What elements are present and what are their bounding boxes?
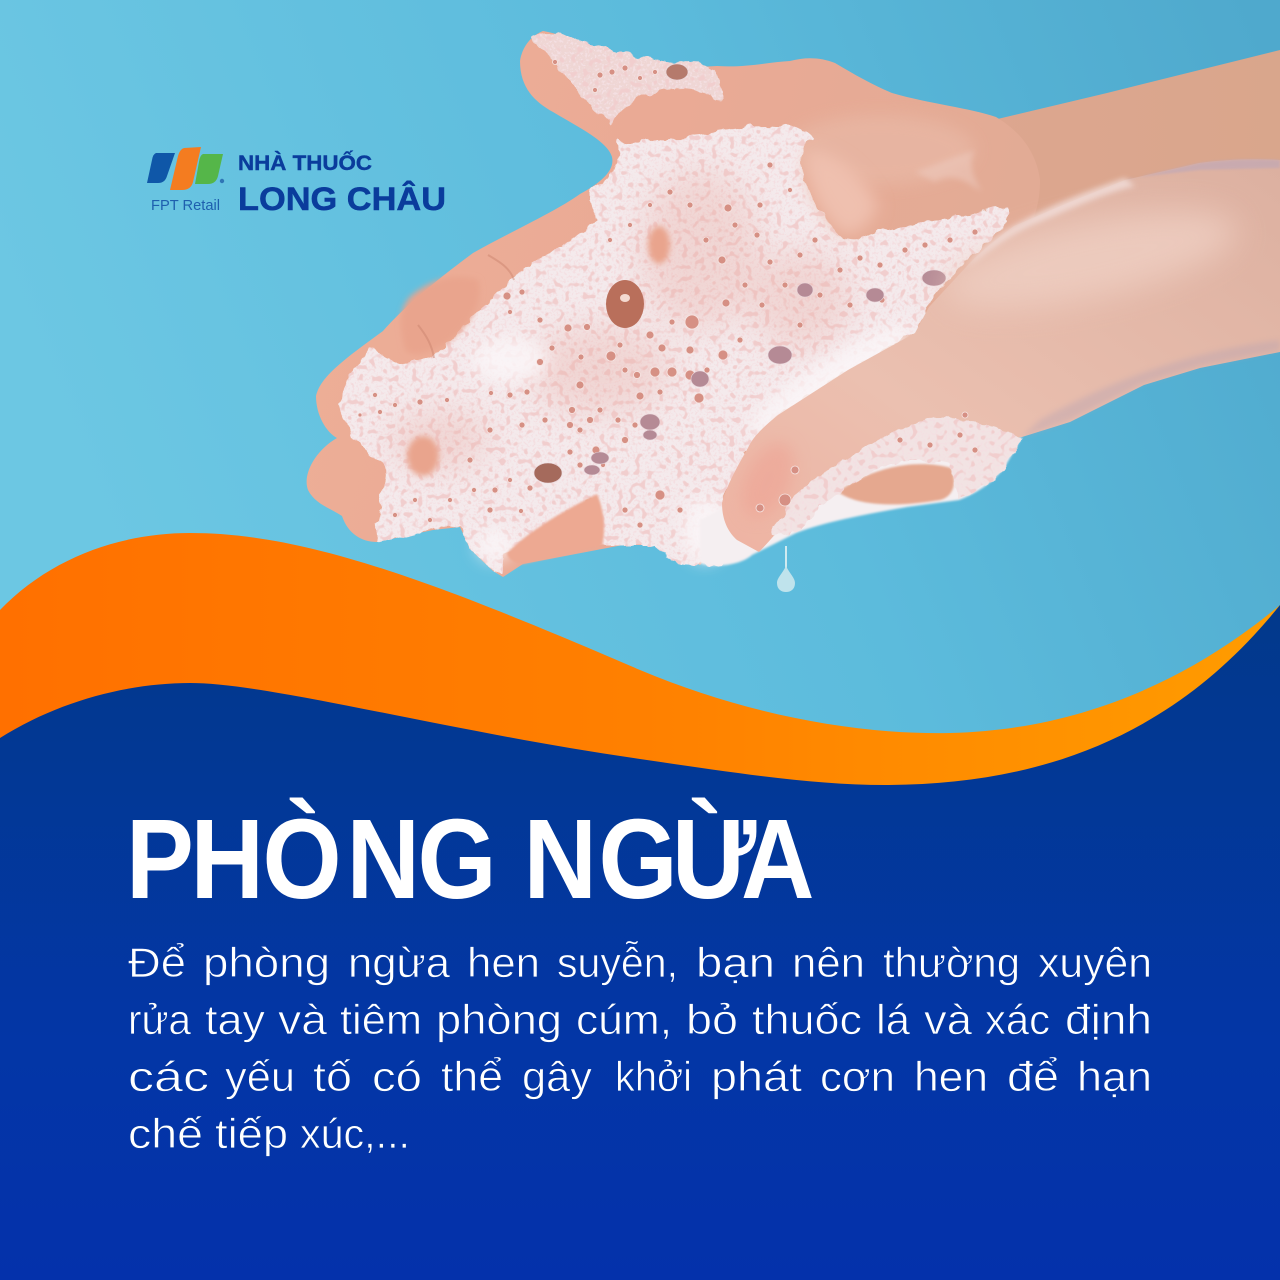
whiter foam areas [472, 311, 921, 562]
line 3: hạn [1077, 1053, 1152, 1100]
line 4: chế [128, 1110, 203, 1157]
FPT Retail text: FPT Retail [151, 198, 220, 214]
line 1 [128, 939, 1152, 986]
gap finger [838, 464, 954, 504]
background: sky blue backdrop [0, 0, 1280, 800]
top rim of lower hand [1125, 159, 1280, 180]
line 1: hen [467, 939, 540, 986]
lower forearm shadow edge [1022, 340, 1280, 437]
pale skin pocket beside foam [807, 150, 878, 234]
line 1: phòng [203, 939, 330, 986]
line 3: khởi [615, 1053, 692, 1100]
logo: FPT Retail and Nhà thuốc Long Châu [147, 147, 446, 217]
foam on lower thumb edge [770, 418, 1022, 535]
photo: soapy hands [307, 31, 1280, 592]
soap specks on back of hand [915, 150, 982, 192]
line 3: các [128, 1053, 209, 1100]
line 2: rửa [128, 996, 192, 1043]
line 2: và [924, 996, 973, 1043]
line 2: xác [985, 996, 1050, 1043]
wave: orange band [0, 533, 1280, 800]
line 1: nên [792, 939, 865, 986]
thumb pads [731, 434, 805, 526]
wave: navy panel [0, 605, 1280, 1280]
line 4: xúc,... [300, 1110, 410, 1157]
foam band under thumb [700, 437, 1022, 566]
bubbles on palm [358, 60, 978, 528]
title: PHÒNG NGỪA [126, 796, 814, 922]
line 2: tay [205, 996, 265, 1043]
soft pink tint across foam [390, 170, 850, 470]
line 2: lá [876, 996, 911, 1043]
line 1: suyễn, [557, 939, 678, 986]
Long Châu text: LONG CHÂU [238, 181, 446, 217]
line 1: Để [128, 939, 186, 986]
line 2: cúm, [576, 996, 672, 1043]
line 3: thể [441, 1053, 503, 1100]
line 2: bỏ [686, 996, 738, 1043]
upper forearm [985, 50, 1280, 240]
light band on forearm [935, 192, 1245, 328]
line 3: gây [522, 1053, 592, 1100]
darker mauve bubbles [534, 64, 946, 483]
icon: FPT blocks [147, 147, 224, 190]
knuckle creases [418, 255, 514, 358]
skin patches showing through foam [401, 226, 670, 476]
Nhà thuốc text: NHÀ THUỐC [238, 151, 372, 175]
line 1: xuyên [1038, 939, 1152, 986]
line 2: định [1065, 996, 1152, 1043]
line 3: có [372, 1053, 422, 1100]
line 2: phòng [436, 996, 562, 1043]
line 4: tiếp [215, 1110, 288, 1157]
line 3: yếu [225, 1053, 295, 1100]
foam on thumb tip [530, 34, 723, 123]
body paragraph [128, 939, 1152, 1157]
line 2: thuốc [752, 996, 862, 1043]
foam on palm [338, 125, 1009, 577]
line 2: và [278, 996, 328, 1043]
lower hand and forearm [722, 159, 1280, 552]
soap streak along lower hand [966, 178, 1135, 267]
water drop [777, 546, 795, 592]
line 2 [128, 996, 1152, 1043]
line 1: ngừa [348, 939, 451, 986]
line 3 [128, 1053, 1152, 1100]
line 3: hen [914, 1053, 988, 1100]
skin shading on back of hand [785, 115, 975, 185]
line 1: bạn [696, 939, 775, 986]
line 4 [128, 1110, 410, 1157]
left hand with fingers and thumb [307, 31, 1040, 577]
line 2: tiêm [340, 996, 422, 1043]
line 3: để [1007, 1053, 1059, 1100]
line 3: phát [711, 1053, 802, 1100]
line 3: tố [313, 1053, 352, 1100]
bubbles on thumb [756, 412, 978, 512]
line 1: thường [883, 939, 1020, 986]
large water bubble [606, 280, 644, 328]
lower finger [507, 494, 604, 564]
line 3: cơn [820, 1053, 895, 1100]
